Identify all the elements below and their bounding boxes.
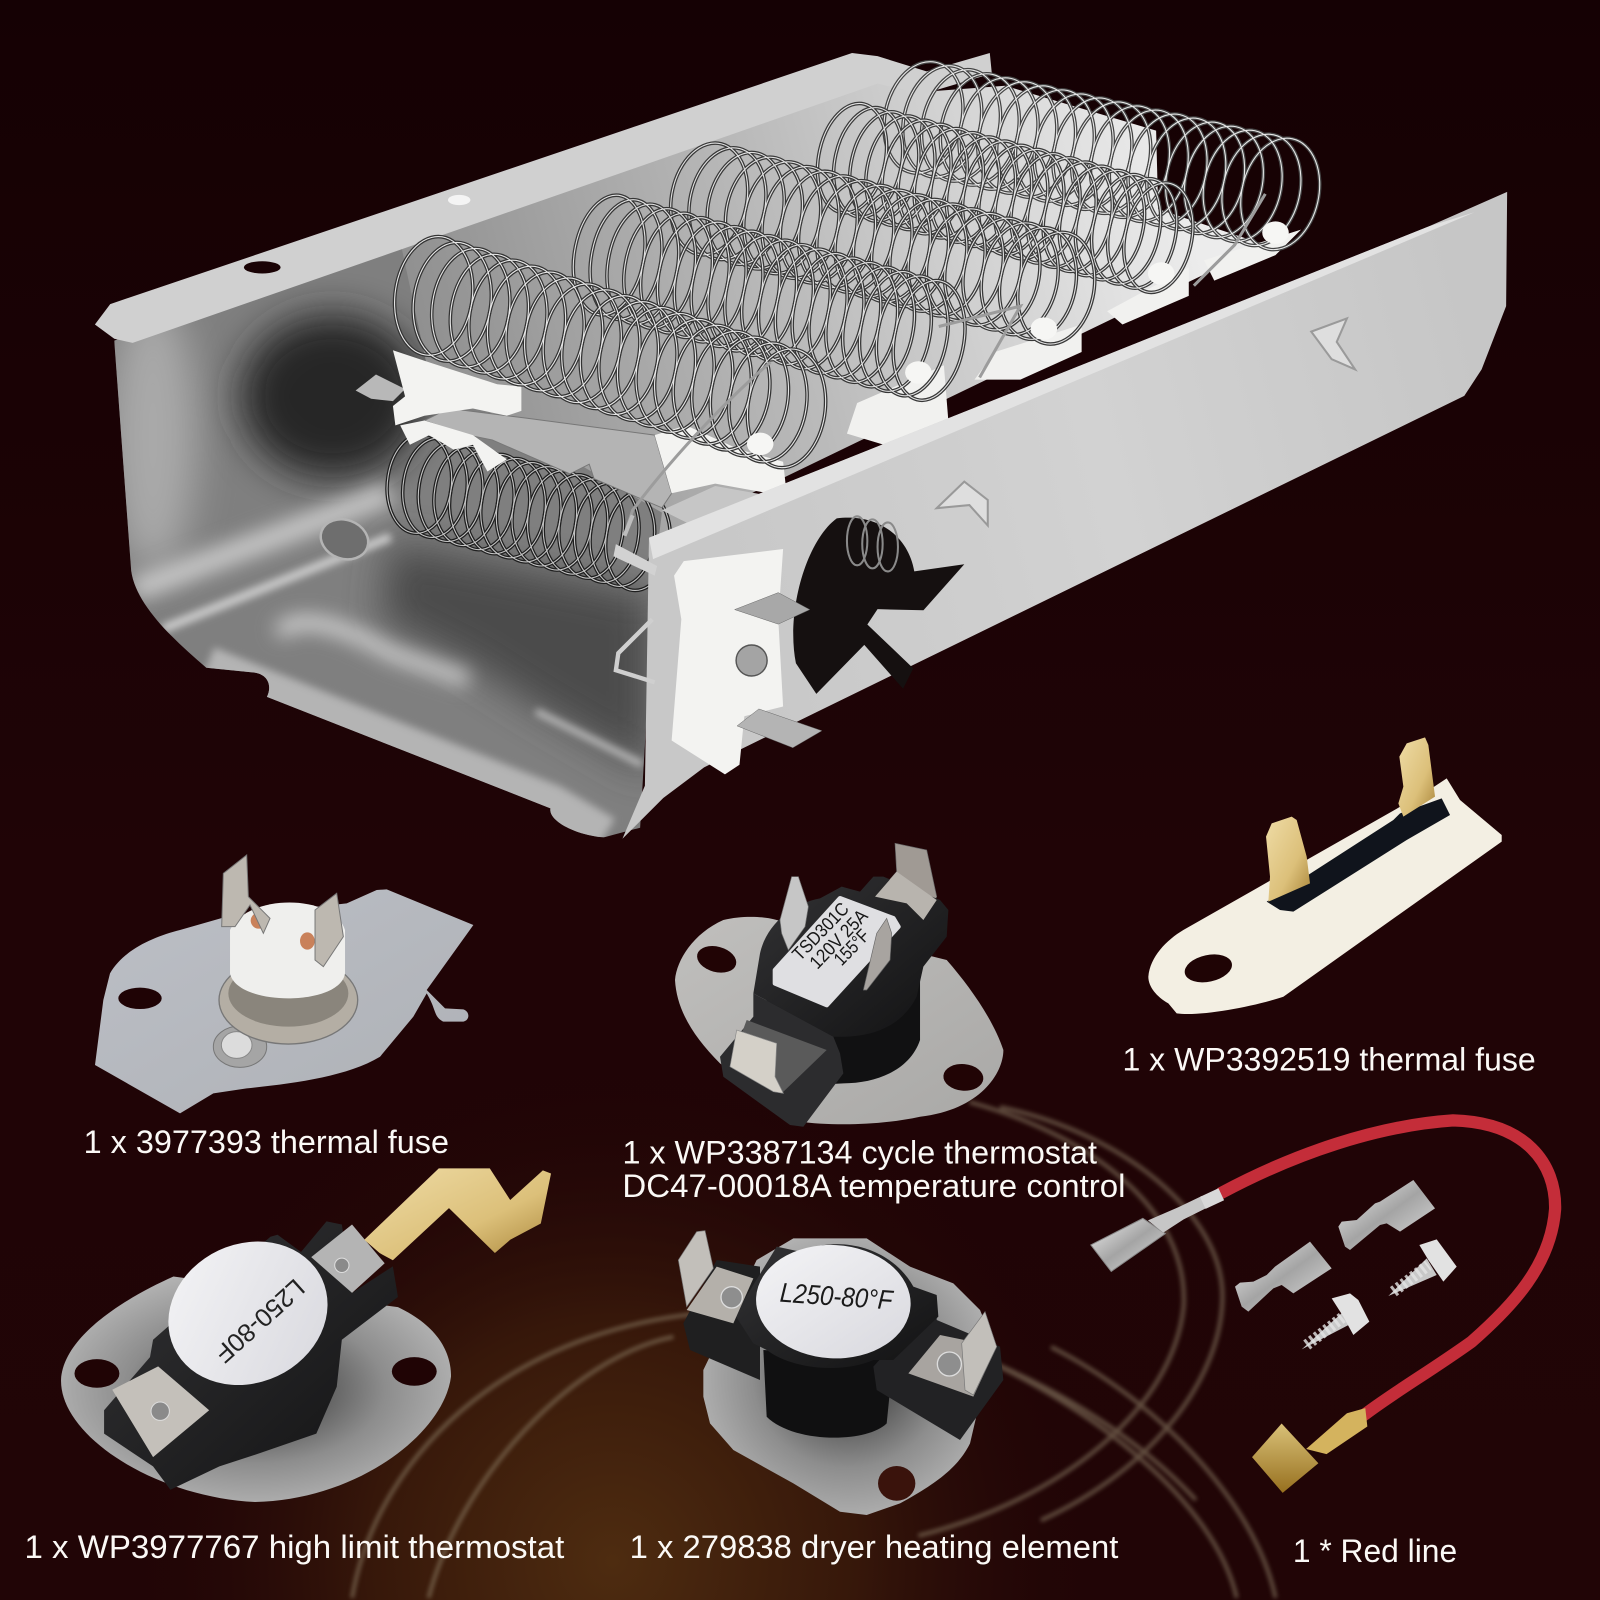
upper silver terminal: [311, 1224, 385, 1293]
coil 5 back: [874, 54, 1330, 257]
copper contacts: [251, 913, 315, 950]
decorative glowing swirl rings: [352, 1102, 1276, 1598]
white label: [775, 898, 898, 1005]
black strip: [1267, 798, 1450, 912]
screw upper: [1388, 1239, 1457, 1296]
wire loop: [624, 515, 633, 536]
lower silver terminal: [112, 1366, 209, 1457]
coil 3: [660, 134, 1105, 353]
label text: TSD301C: [788, 898, 853, 964]
lower terminal: [730, 1030, 783, 1093]
screw lower: [1302, 1293, 1369, 1349]
white disc: [753, 1241, 914, 1362]
heating element tray: [90, 53, 1507, 862]
gold strap: [364, 1168, 551, 1260]
coil seen through hole: [847, 516, 898, 571]
flange hole light: [448, 195, 470, 205]
upper interior behind coils: [378, 82, 1265, 571]
white ceramic cap: [230, 903, 345, 998]
white body: [1148, 778, 1502, 1014]
white disc: [145, 1216, 351, 1411]
small terminals and screws: [1235, 1180, 1457, 1349]
left terminal: [222, 855, 270, 933]
plate: [95, 889, 473, 1113]
hole: [878, 1466, 915, 1501]
red wire: [1221, 1120, 1555, 1416]
plate holes: [74, 1357, 437, 1388]
plates and ceramic under first coil: [356, 350, 786, 527]
gold connector: [1252, 1408, 1367, 1493]
part: WP3977767 high limit thermostat: [61, 1168, 551, 1502]
front wall: [622, 192, 1507, 839]
lower cylinder: [763, 1350, 893, 1438]
dimple: [315, 513, 374, 566]
disc text: L250-80°F: [779, 1277, 895, 1316]
dark cut-out hole: [793, 518, 964, 694]
flange hole dark: [244, 261, 281, 273]
coil lead wires: [624, 194, 1265, 536]
gold terminals: [1266, 817, 1310, 902]
plate hole: [118, 988, 162, 1009]
back flange with holes: [95, 53, 992, 343]
back terminal: [875, 843, 937, 920]
right wing: [873, 1297, 1003, 1440]
label: WP3977767: 1 x WP3977767 high limit thermostat: [24, 1528, 564, 1565]
part: 279838 dryer heating element: [678, 1231, 1003, 1515]
ceramic mounts back rows: [847, 230, 1301, 449]
left wall and floor: [114, 249, 662, 838]
plate: [675, 917, 1003, 1124]
disc text: L250-80F: [209, 1273, 310, 1368]
crimp terminal left: [1235, 1242, 1332, 1312]
tab slot middle: [937, 482, 988, 526]
left terminal: [678, 1231, 753, 1323]
crimp terminal right: [1338, 1180, 1435, 1250]
back terminal front: [875, 872, 937, 920]
right terminal: [908, 1312, 997, 1397]
right terminal: [863, 918, 892, 990]
label: WP3387134: DC47-00018A temperature control: [622, 1167, 1126, 1204]
label: WP3387134: [622, 1133, 1126, 1204]
black cap: [753, 877, 948, 1037]
part: WP3392519 thermal fuse: [1148, 737, 1502, 1014]
label text: 120V 25A: [805, 905, 872, 973]
black body: [104, 1221, 398, 1490]
white pegs: [747, 221, 1289, 455]
part: red wire kit: [1091, 1120, 1555, 1493]
flange ring: [219, 956, 358, 1044]
black cap: [735, 1244, 938, 1368]
coil 4: [808, 96, 1203, 300]
lower coil: [380, 427, 677, 598]
part: WP3387134 cycle thermostat: [675, 843, 1003, 1127]
plate: [61, 1277, 451, 1502]
hole: [1182, 950, 1235, 986]
lower housing: [720, 993, 843, 1127]
lower cylinder: [760, 953, 920, 1087]
plate holes: [694, 942, 984, 1092]
left wing: [683, 1260, 760, 1380]
end block, pin and screw: [613, 544, 822, 774]
label text: 155°F: [829, 925, 874, 969]
tab slot right: [1311, 318, 1355, 369]
rivet: [213, 1026, 267, 1067]
upper left terminal: [780, 877, 808, 950]
coil 2: [563, 187, 975, 409]
plate: [703, 1238, 993, 1515]
label: WP3392519: 1 x WP3392519 thermal fuse: [1122, 1040, 1536, 1077]
part: 3977393 thermal fuse: [95, 855, 473, 1113]
right terminal: [315, 893, 343, 967]
label: 279838: 1 x 279838 dryer heating element: [630, 1528, 1118, 1565]
coil 1 front: [384, 226, 836, 478]
label: WP3387134: 1 x WP3387134 cycle thermostat: [622, 1133, 1097, 1170]
label: 3977393: 1 x 3977393 thermal fuse: [84, 1123, 449, 1160]
lower contact plate: [730, 1020, 827, 1093]
silver connector: [1091, 1188, 1224, 1271]
label: red line: 1 * Red line: [1293, 1532, 1457, 1569]
